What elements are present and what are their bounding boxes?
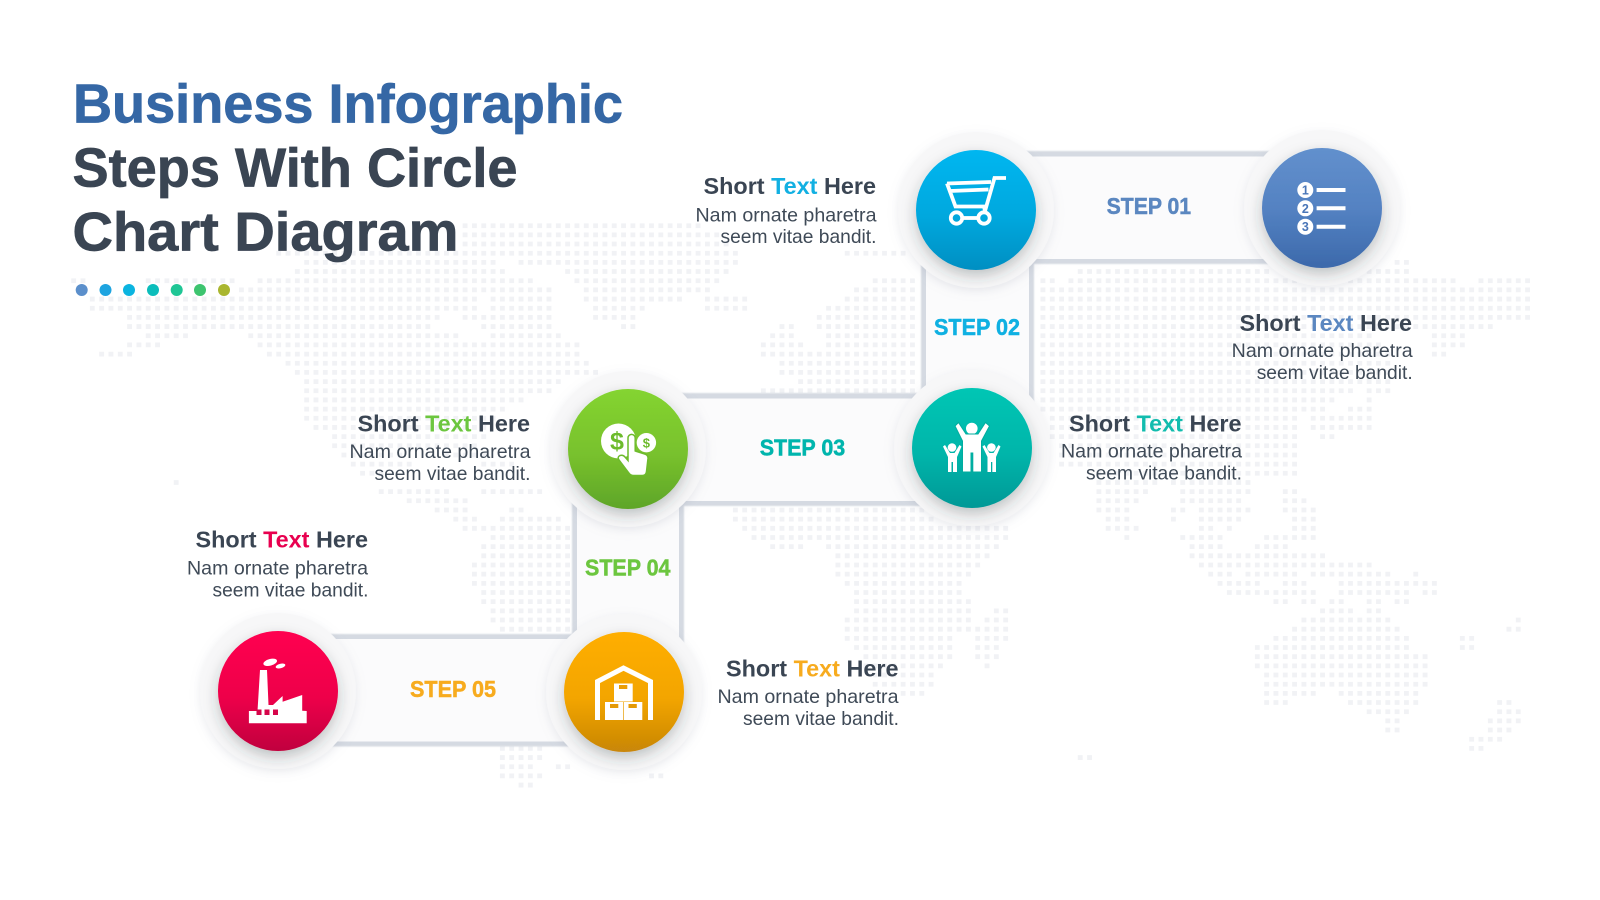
icon: factory	[249, 657, 307, 723]
circle: numbered list icon	[1244, 130, 1400, 286]
icon: numbered list: 3	[1302, 220, 1309, 234]
icon: numbered list	[1297, 182, 1346, 235]
text block: step 02	[696, 173, 877, 248]
icon: coins and pointing hand	[601, 424, 656, 476]
text block: warehouse step: Short Text Here	[726, 656, 898, 682]
step 04 label: STEP 04	[585, 555, 670, 581]
title	[72, 74, 623, 263]
text block: warehouse step: seem vitae bandit.	[743, 708, 899, 730]
text block: step 03	[1061, 411, 1242, 485]
text block: step 04	[350, 411, 531, 485]
text block: step 05: seem vitae bandit.	[212, 580, 368, 602]
stepped band path connecting the circles	[278, 151, 1322, 746]
icon: warehouse with boxes	[598, 668, 650, 720]
text block: step 05: Short Text Here	[196, 526, 368, 552]
icon: numbered list: 2	[1302, 202, 1309, 216]
text block: warehouse step	[718, 656, 899, 730]
title: Business Infographic	[73, 74, 623, 135]
text block: step 04: seem vitae bandit.	[374, 463, 530, 485]
step 05 label: STEP 05	[410, 676, 496, 702]
text block: step 05: Nam ornate pharetra	[187, 558, 368, 580]
circle: warehouse icon	[546, 614, 702, 770]
step 03 label: STEP 03	[760, 435, 845, 461]
text block: step 03: Short Text Here	[1069, 411, 1242, 437]
icon: people	[943, 422, 1000, 472]
text block: step 04: Nam ornate pharetra	[350, 441, 531, 463]
circle: shopping cart icon	[898, 132, 1054, 288]
text block: step 04: Short Text Here	[358, 411, 530, 437]
step 02 label: STEP 02	[934, 314, 1020, 340]
text block: step 02: Short Text Here	[704, 173, 876, 199]
icon: shopping cart	[947, 178, 1006, 224]
icon: coins and pointing hand: $	[643, 436, 651, 450]
text block: step 01: seem vitae bandit.	[1257, 362, 1413, 384]
text block: step 03: Nam ornate pharetra	[1061, 441, 1242, 463]
text block: step 01: Nam ornate pharetra	[1232, 340, 1413, 362]
text block: step 01	[1232, 310, 1413, 384]
text block: step 02: seem vitae bandit.	[720, 226, 876, 248]
icon: numbered list: 1	[1302, 184, 1309, 198]
step 01 label: STEP 01	[1107, 193, 1191, 219]
text block: warehouse step: Nam ornate pharetra	[718, 686, 899, 708]
title: Chart Diagram	[72, 202, 458, 263]
text block: step 03: seem vitae bandit.	[1086, 463, 1242, 485]
circle: money hand icon	[550, 371, 706, 527]
icon: coins and pointing hand: $	[610, 428, 624, 456]
circle: people icon	[894, 370, 1050, 526]
circle: factory icon	[200, 613, 356, 769]
title: Steps With Circle	[72, 138, 518, 199]
text block: step 02: Nam ornate pharetra	[696, 204, 877, 226]
title accent dots	[76, 284, 230, 296]
text block: step 05	[187, 526, 368, 602]
text block: step 01: Short Text Here	[1240, 310, 1412, 336]
dotted world map background	[71, 226, 1534, 785]
